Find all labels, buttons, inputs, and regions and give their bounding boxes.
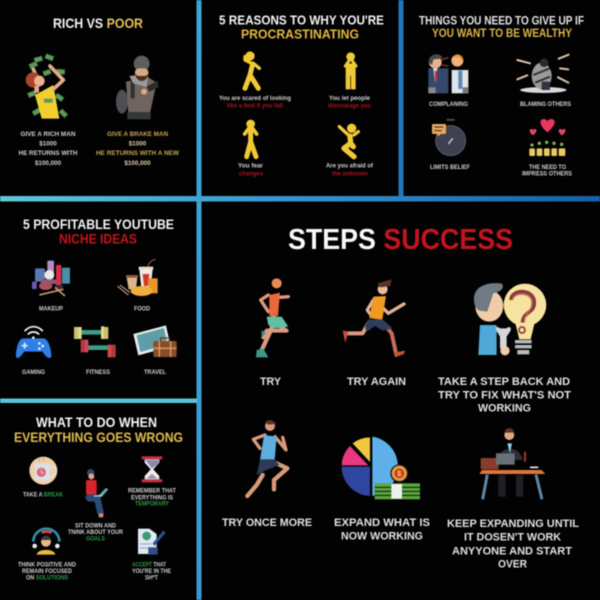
labels: niches: TRAVEL [144, 369, 166, 376]
labels: reasons: You are scared of looking [219, 95, 291, 102]
labels: steps: ANYYONE AND START [452, 545, 572, 557]
labels: give up: BLAMING OTHERS [520, 101, 571, 108]
labels: poor man: $100,000 [124, 160, 151, 167]
labels: what to do: TEMPORARY [135, 501, 170, 508]
labels: what to do: ON SOLUTIONS [26, 575, 68, 582]
heading: niche ideas [23, 217, 174, 247]
labels: what to do: GOALS [86, 535, 105, 542]
labels: niches [22, 306, 166, 376]
labels: poor man: $1000 [129, 140, 147, 148]
icon: runner yellow top [343, 279, 405, 357]
icon: pie chart with coins: $ [397, 469, 401, 478]
heading: 5 reasons: 5 REASONS TO WHY YOU'RE [219, 12, 384, 28]
icon: coffee break [29, 457, 57, 485]
labels: what to do: EVERYTHING IS [131, 494, 173, 501]
labels: steps: TAKE A STEP BACK AND [438, 376, 570, 388]
icon: makeup [32, 261, 70, 296]
labels: what to do: YOU'RE IN THE [132, 568, 171, 575]
heading: things to give up: YOU WANT TO BE WEALTHY [432, 26, 572, 40]
labels: what to do: SH*T [145, 575, 158, 582]
icon: stopwatch [432, 119, 466, 156]
labels: reasons: You let people [329, 95, 371, 102]
icon: rich man with money [26, 54, 68, 119]
labels: give up: COMPLANING [429, 101, 468, 108]
labels: steps: WORKING [478, 403, 531, 415]
labels: what to do: REMAIN FOCUSED [22, 568, 72, 575]
heading: steps success: STEPS SUCCESS [288, 224, 513, 256]
labels: poor man: HE RETURNS WITH A NEW [96, 150, 179, 157]
labels: rich man: HE RETURNS WITH [18, 150, 78, 157]
labels: give up: IMPRESS OTHERS [522, 171, 572, 178]
heading: what to do: EVERYTHING GOES WRONG [14, 430, 183, 445]
labels: niches: GAMING [22, 369, 45, 376]
labels: give up: LIMITS BELIEF [430, 164, 470, 171]
icon: complaining men [428, 54, 468, 93]
labels: steps [222, 376, 579, 571]
icon: poor man with backpack [116, 56, 159, 119]
icon: hearts and people [529, 119, 566, 156]
labels: reasons: You fear [238, 163, 264, 170]
labels: steps: TRY [260, 376, 281, 388]
icon: gamepad with wifi [16, 327, 51, 358]
icon: food [117, 259, 158, 296]
labels: what to do: TNINK ABOUT YOUR [68, 529, 123, 536]
icon: positive head gauge [32, 529, 60, 555]
labels: steps: OVER [498, 559, 527, 571]
labels: reasons: like a fool if you fail [227, 102, 283, 110]
labels: rich man [18, 131, 78, 167]
icon: lightbulb question [474, 283, 546, 355]
labels: steps: TRY TO FIX WHAT'S NOT [438, 390, 571, 402]
icon: blaming others [517, 55, 569, 93]
labels: niches: FITNESS [86, 369, 110, 376]
heading: rich vs poor: RICH VS POOR [53, 15, 143, 31]
icon: woman with laptop [85, 469, 108, 517]
icon: travel map and suitcase [133, 325, 177, 357]
labels: steps: TRY ONCE MORE [222, 517, 312, 529]
panel: steps success [222, 224, 579, 571]
heading: 5 reasons: PROCRASTINATING [241, 27, 359, 42]
labels: reasons: changes [239, 170, 264, 178]
labels: what to do: SIT DOWN AND [75, 523, 116, 530]
labels: what to do: TAKE A BREAK [23, 492, 63, 499]
labels: reasons [219, 95, 374, 178]
icon: runner blue vest [247, 420, 287, 496]
labels: niches: FOOD [134, 306, 150, 313]
icon: scared figures [245, 51, 358, 157]
heading: things to give up [419, 14, 584, 40]
labels: niches: MAKEUP [39, 306, 63, 313]
labels: steps: TRY AGAIN [347, 376, 406, 388]
labels: rich man: $100,000 [35, 160, 62, 167]
icon: businessman at desk [479, 428, 545, 499]
labels: what to do [18, 488, 176, 582]
labels: poor man: GIVE A BRAKE MAN [107, 131, 168, 138]
labels: steps: EXPAND WHAT IS [334, 517, 430, 529]
panel: youtube niche ideas [16, 217, 177, 376]
icon: dumbbells [74, 326, 116, 357]
labels: what to do: REMEMBER THAT [128, 488, 176, 495]
labels: steps: IT DOSEN'T WORK [464, 532, 562, 544]
icon: accept document [138, 529, 166, 555]
heading: niche ideas: NICHE IDEAS [59, 232, 137, 247]
labels: reasons: Are you afraid of [326, 163, 374, 170]
labels: steps: KEEP EXPANDING UNTIL [447, 518, 579, 530]
labels: what to do: THINK POSITIVE AND [18, 562, 76, 569]
labels: give up: THE NEED TO [529, 164, 566, 171]
icon: runner orange top [256, 278, 288, 357]
heading: 5 reasons [219, 12, 384, 42]
icon: hourglass [142, 456, 162, 482]
heading: what to do [14, 415, 183, 445]
labels: poor man [96, 131, 179, 167]
panel: rich vs poor [18, 15, 179, 167]
panel: reasons for procrastinating [219, 12, 384, 178]
labels: reasons: discourage you [328, 102, 371, 110]
panel: things to give up [419, 14, 584, 178]
labels: reasons: the unknown [332, 170, 368, 178]
icon: pie chart with coins [342, 437, 420, 499]
panel: what to do when everything goes wrong [14, 415, 183, 582]
heading: what to do: WHAT TO DO WHEN [36, 415, 157, 430]
labels: steps: NOW WORKING [341, 531, 423, 543]
labels: rich man: $1000 [39, 140, 57, 148]
labels: what to do: ACCEPT THAT [132, 562, 166, 569]
labels: give up [429, 101, 572, 178]
heading: niche ideas: 5 PROFITABLE YOUTUBE [23, 217, 174, 232]
labels: rich man: GIVE A RICH MAN [20, 131, 76, 138]
